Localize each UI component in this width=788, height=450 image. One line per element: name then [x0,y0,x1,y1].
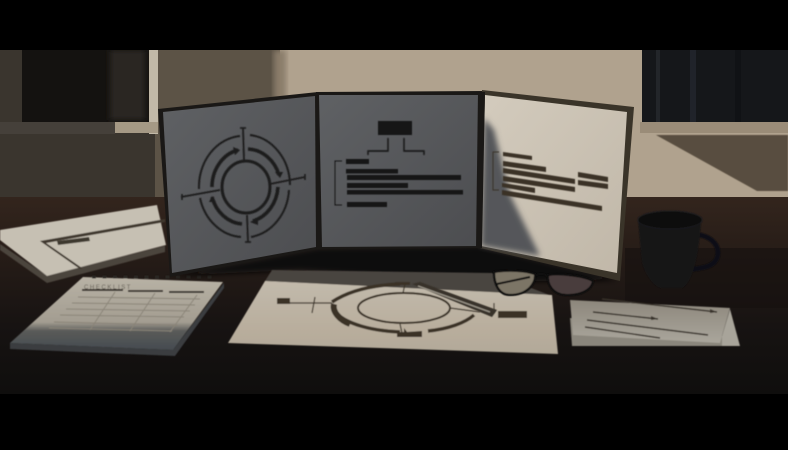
desk [0,197,788,394]
spokes [181,128,305,242]
arrows on cards [585,299,717,338]
org chart [368,121,424,155]
arrow heads [209,147,283,225]
checklist title: CHECKLIST [84,285,132,291]
outer ring [199,135,290,237]
middle panel [316,91,484,249]
right lens [548,274,593,295]
left sheet on desk [0,205,166,283]
stack of cards [570,299,740,346]
column headers [82,290,204,292]
ring diagram [290,284,494,333]
central sheet with ring diagram [228,270,558,354]
diagram blocks [277,282,527,337]
notepad checklist [10,277,224,356]
coffee mug [638,211,718,288]
right panel [476,90,634,281]
middle ring arrows [212,149,279,224]
bridge and temple [497,274,548,284]
tri-fold board [158,90,634,282]
checklist rows [49,292,200,332]
spiral binding [92,276,216,278]
board base shadow [170,246,618,282]
circular diagram [181,128,305,242]
wall and shelves [0,50,788,200]
pen [412,282,497,317]
cast shadow [481,118,540,256]
left panel [158,92,319,277]
text bars [335,159,463,207]
glasses [494,271,593,295]
left lens [494,271,535,295]
slanted text bars [493,152,608,211]
